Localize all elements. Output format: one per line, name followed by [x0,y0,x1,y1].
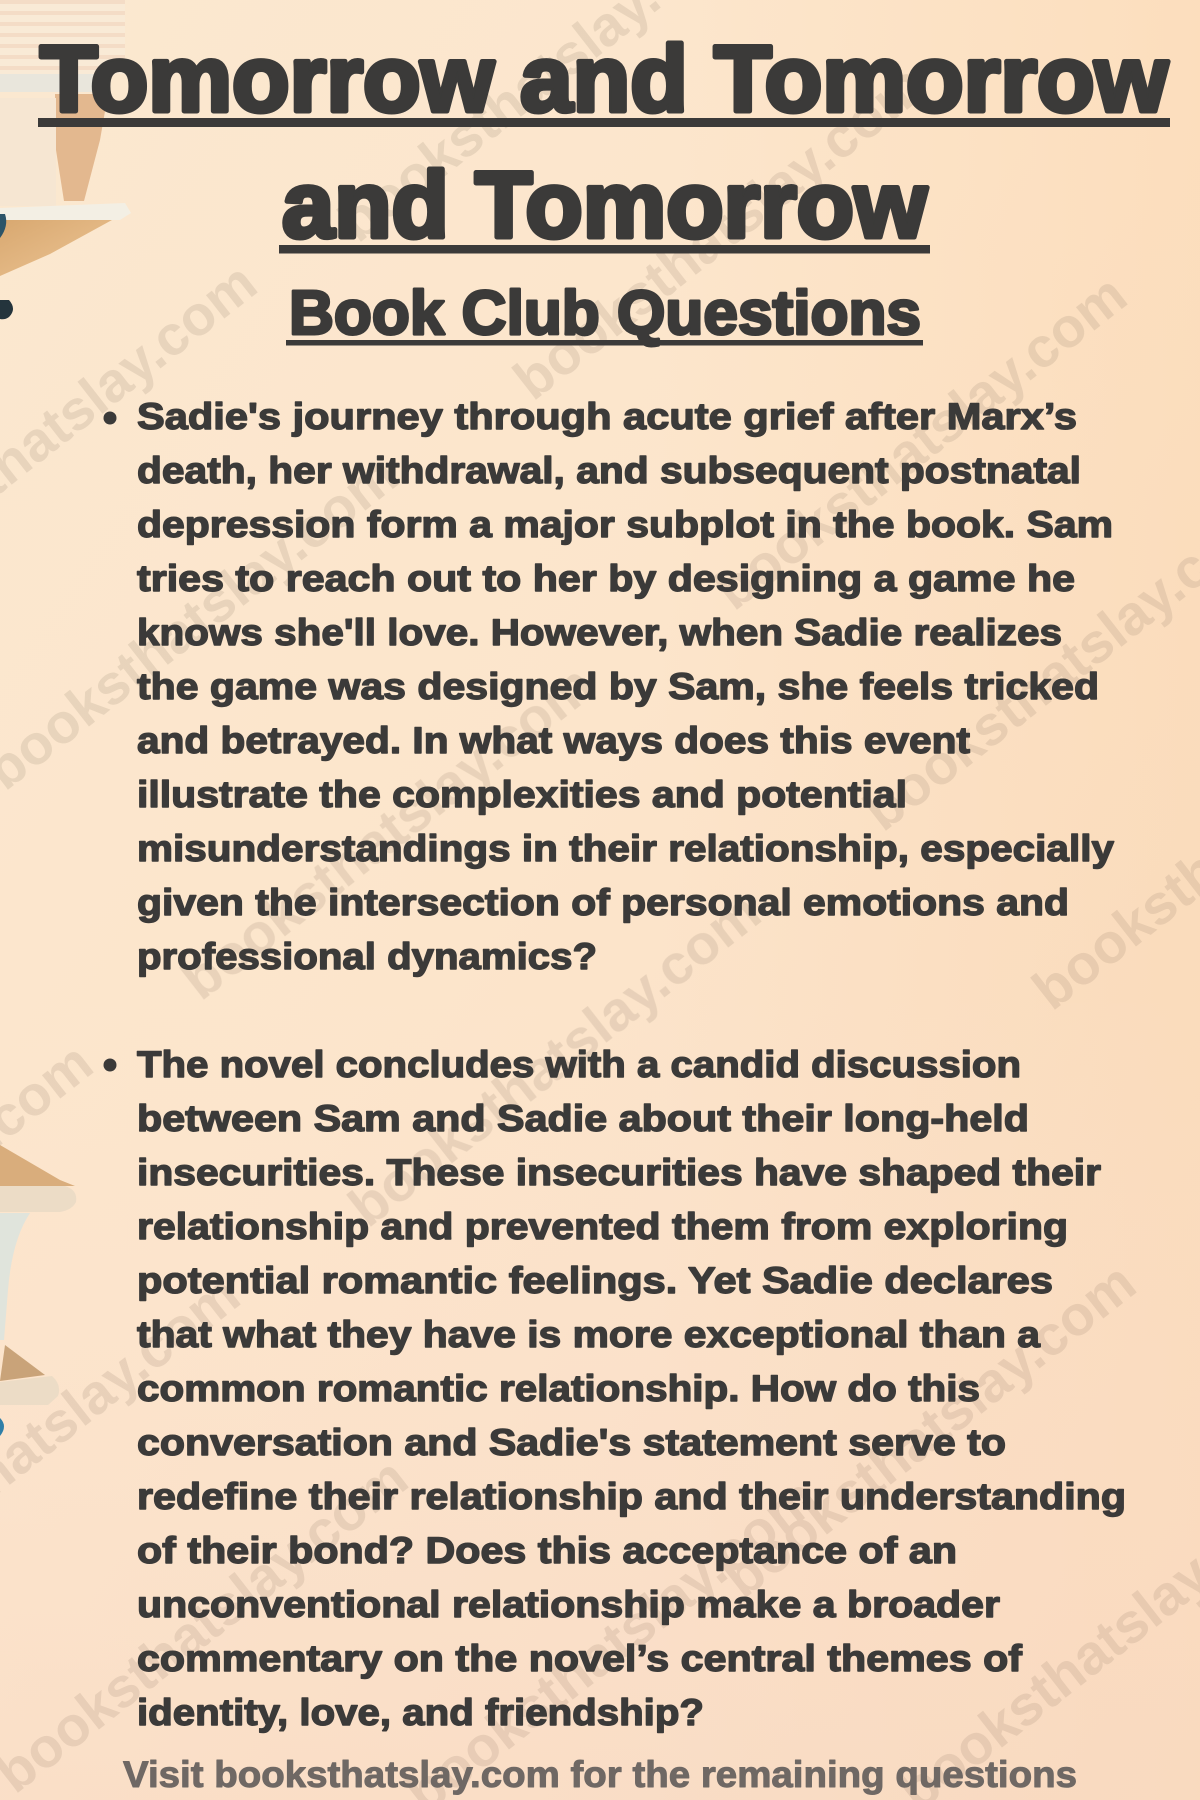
question 2 [104,1043,1126,1733]
subtitle: Book Club Questions [289,279,921,348]
question 2 text: commentary on the novel’s central themes of [137,1637,1023,1679]
question 2 text: insecurities. These insecurities have shaped their [137,1151,1101,1193]
question 2 text [137,1043,1126,1733]
book stack illustration: lower left [0,1145,76,1436]
question 1 text: depression form a major subplot in the book. Sam [137,503,1113,545]
question 1 [104,395,1114,977]
question 1 text: death, her withdrawal, and subsequent postnatal [137,449,1081,491]
book stack illustration: top left [0,0,131,319]
watermarks: booksthatslay.com [703,262,1138,621]
title: Tomorrow and Tomorrow [40,26,1169,131]
bullet 2 [104,1058,116,1072]
question 2 text: unconventional relationship make a broader [137,1583,1000,1625]
question 1 text: misunderstandings in their relationship, especially [137,827,1114,869]
question 1 text: given the intersection of personal emotions and [137,881,1069,923]
question 2 text: redefine their relationship and their understanding [137,1475,1126,1517]
question 2 text: between Sam and Sadie about their long-held [137,1097,1029,1139]
question 1 text: Sadie's journey through acute grief after Marx’s [137,395,1077,437]
question 2 text: conversation and Sadie's statement serve to [137,1421,1006,1463]
question 2 text: relationship and prevented them from exploring [137,1205,1068,1247]
question 2 text: of their bond? Does this acceptance of an [137,1529,957,1571]
watermarks: booksthatslay.com [170,652,605,1011]
question 1 text: the game was designed by Sam, she feels tricked [137,665,1099,707]
question 2 text: common romantic relationship. How do this [137,1367,980,1409]
footer call to action: Visit booksthatslay.com for the remaining questions [123,1754,1077,1795]
question 2 text: that what they have is more exceptional than a [137,1313,1041,1355]
question 2 text: The novel concludes with a candid discussion [137,1043,1021,1085]
watermarks: booksthatslay.com [337,879,772,1238]
title: and Tomorrow [282,152,928,257]
question 1 text: illustrate the complexities and potential [137,773,907,815]
watermarks: booksthatslay.com [712,1250,1147,1609]
question 1 text [137,395,1114,977]
watermarks: booksthatslay.com [502,52,937,411]
bullet 1 [104,412,116,424]
question 2 text: identity, love, and friendship? [137,1691,704,1733]
question 1 text: and betrayed. In what ways does this event [137,719,971,761]
question 1 text: tries to reach out to her by designing a game he [137,557,1075,599]
question 1 text: knows she'll love. However, when Sadie realizes [137,611,1062,653]
question 2 text: potential romantic feelings. Yet Sadie declares [137,1259,1053,1301]
title [38,26,1170,257]
question 1 text: professional dynamics? [137,935,597,977]
